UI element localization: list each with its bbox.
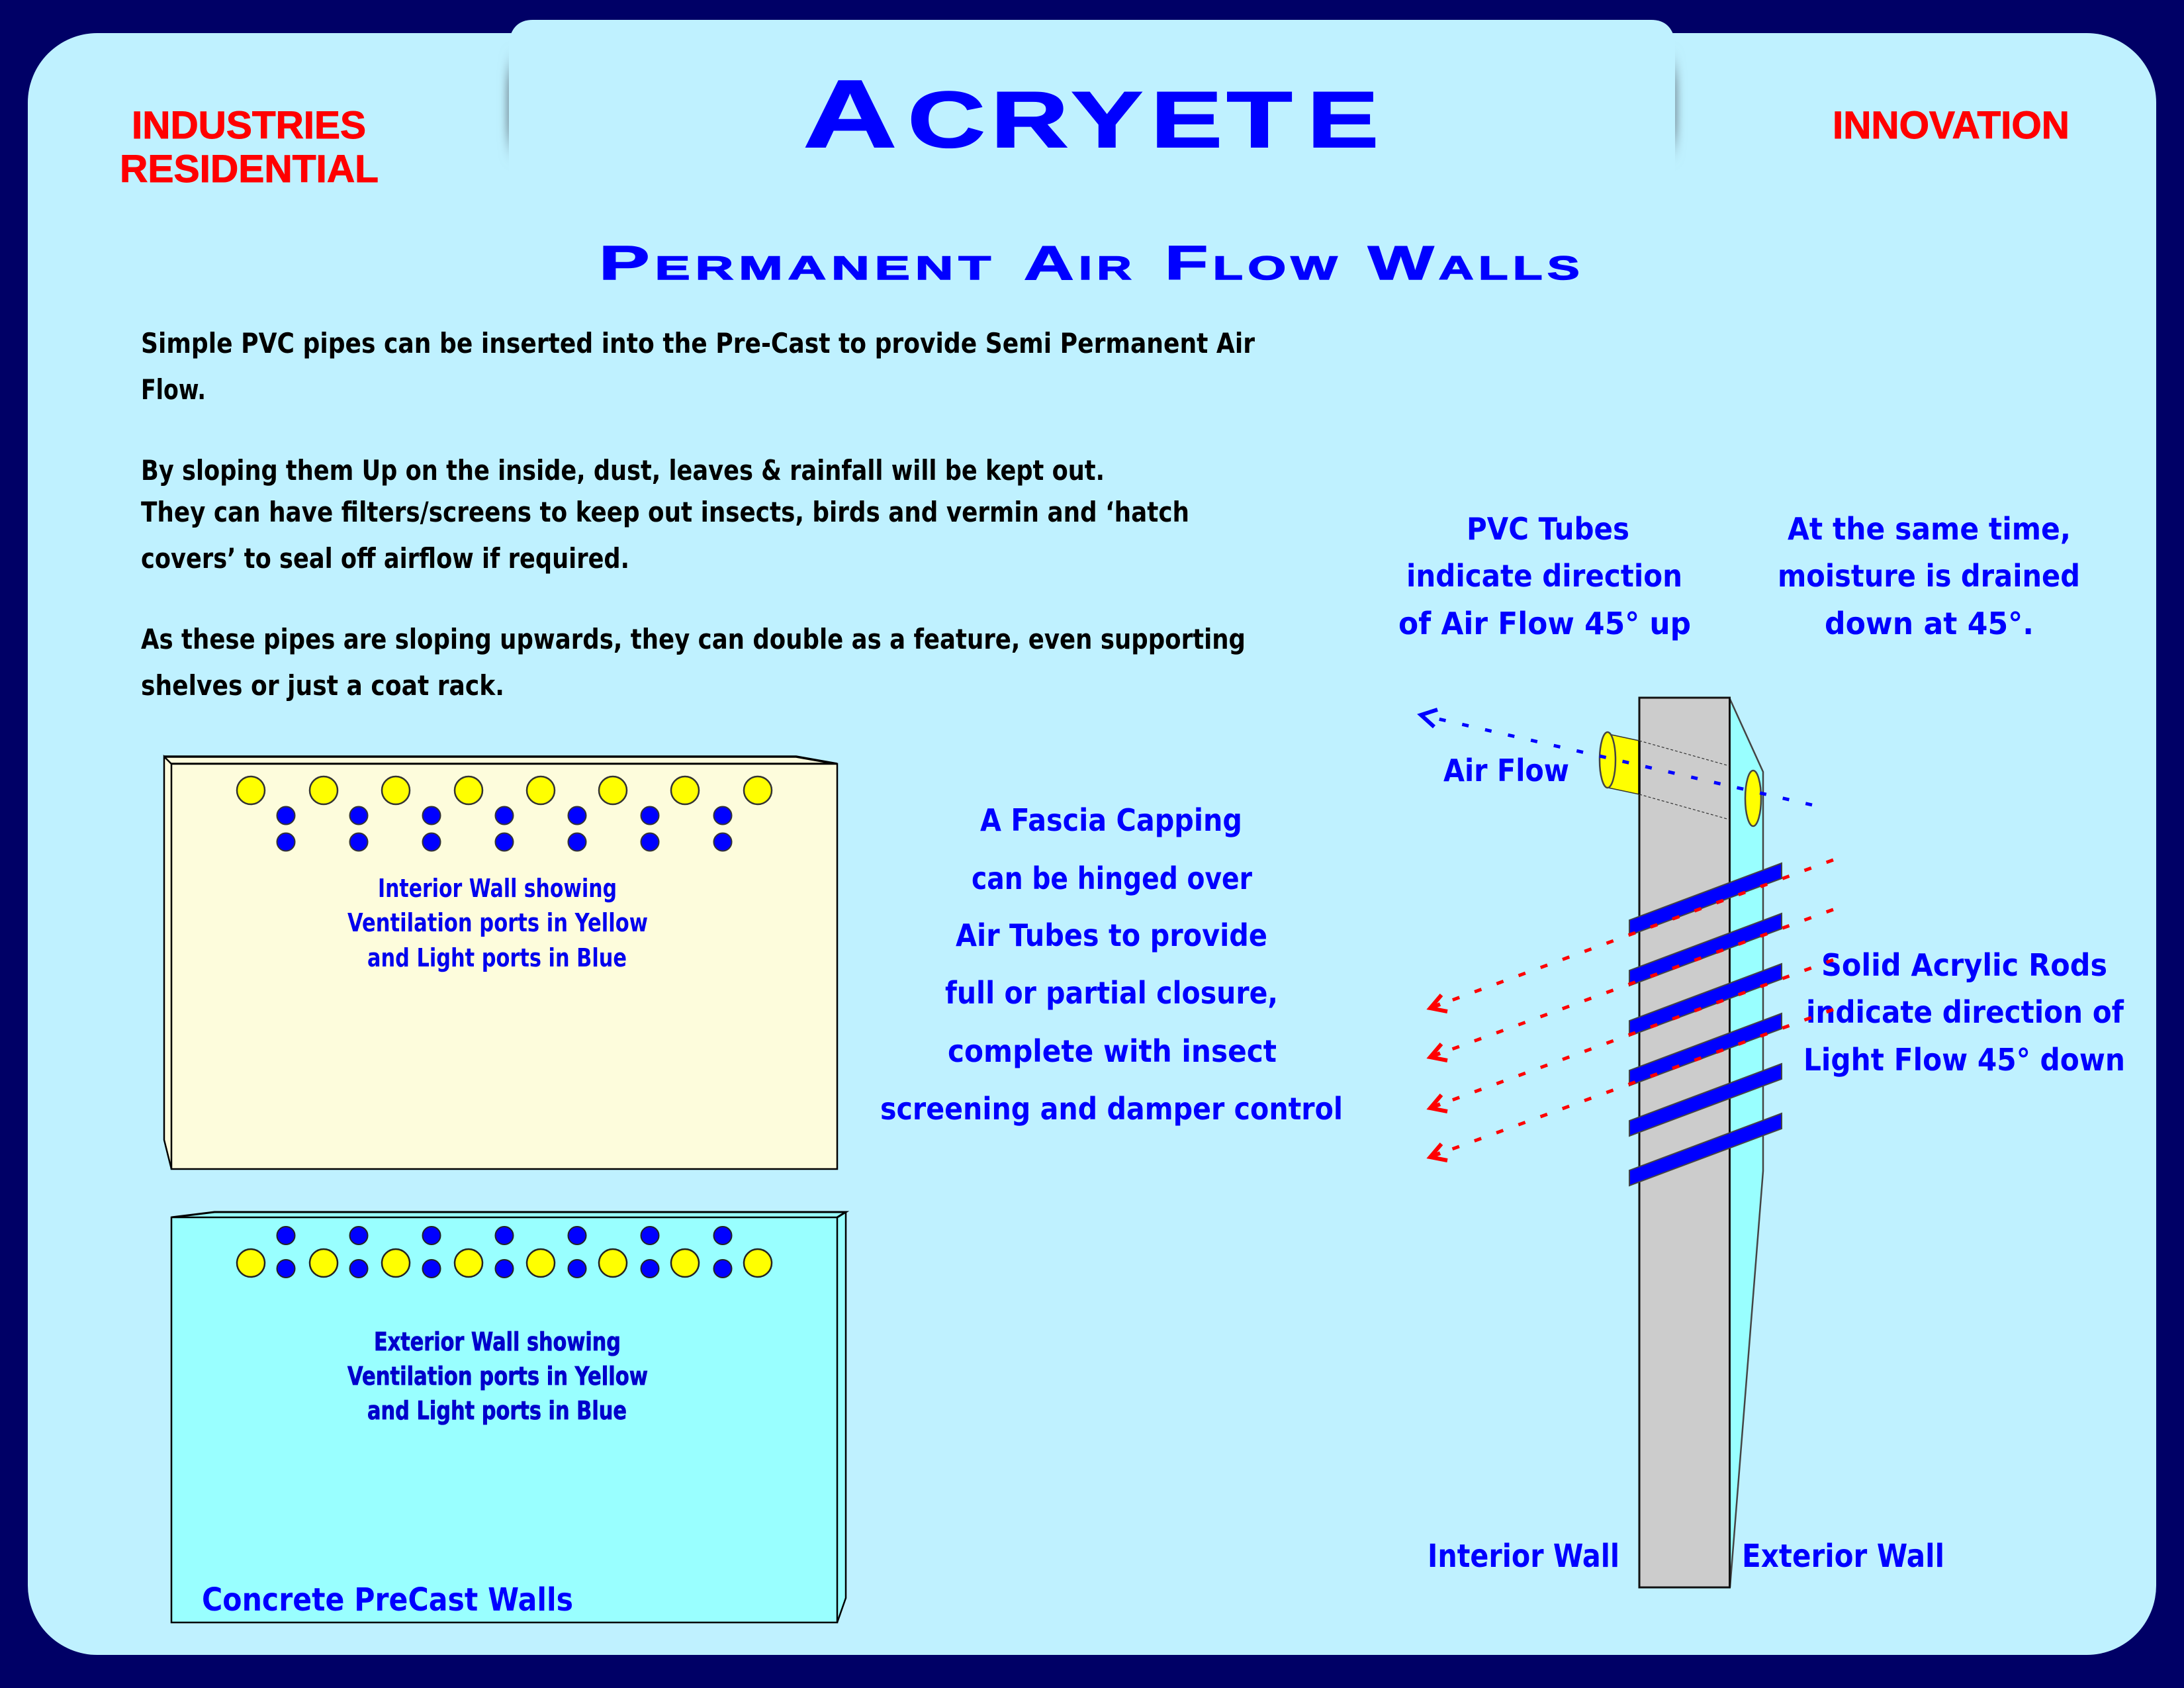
exterior wall caption: Ventilation ports in Yellow	[347, 1362, 648, 1391]
moisture text: At the same time,	[1788, 511, 2071, 547]
category labels left: RESIDENTIAL	[120, 148, 379, 191]
ventilation ports	[237, 1249, 772, 1277]
light ports	[277, 1227, 732, 1278]
acrylic rods	[1629, 863, 1782, 1186]
body text: Simple PVC pipes can be inserted into the Pre-Cast to provide Semi Permanent Air	[141, 327, 1255, 359]
interior wall caption: and Light ports in Blue	[367, 943, 627, 972]
subtitle: Permanent	[599, 237, 996, 290]
title: A	[803, 60, 897, 167]
title: CRYETE	[908, 75, 1379, 164]
pvc tubes text: of Air Flow 45° up	[1398, 606, 1691, 641]
subtitle: Air	[1024, 237, 1136, 290]
fascia capping text: screening and damper control	[880, 1091, 1343, 1127]
interior wall caption: Interior Wall showing	[378, 874, 617, 903]
moisture text	[1778, 511, 2080, 641]
interior wall caption: Ventilation ports in Yellow	[347, 908, 648, 937]
exterior wall label: Exterior Wall	[1742, 1538, 1944, 1575]
title tab	[506, 20, 1678, 179]
pvc tubes text	[1398, 511, 1691, 641]
solid acrylic rods text: indicate direction of	[1806, 994, 2124, 1030]
pvc tubes text: indicate direction	[1406, 558, 1682, 594]
category label right: INNOVATION	[1833, 104, 2070, 147]
wall cross-section diagram	[1421, 698, 2125, 1587]
exterior fascia	[1729, 698, 1763, 1587]
fascia capping text: complete with insect	[948, 1033, 1277, 1069]
category labels left	[120, 104, 379, 191]
body text: By sloping them Up on the inside, dust, leaves & rainfall will be kept out.	[141, 454, 1105, 487]
interior wall caption	[347, 874, 648, 972]
fascia capping text	[880, 802, 1343, 1127]
air flow label: Air Flow	[1443, 753, 1569, 788]
body text: covers’ to seal off airflow if required.	[141, 542, 629, 575]
body text	[141, 327, 1255, 702]
concrete wall	[1639, 698, 1730, 1587]
ventilation ports	[237, 776, 772, 804]
fascia capping text: full or partial closure,	[945, 975, 1278, 1011]
subtitle	[599, 237, 1584, 290]
body text: They can have filters/screens to keep out insects, birds and vermin and ‘hatch	[141, 496, 1189, 528]
category labels left: INDUSTRIES	[132, 104, 366, 147]
pvc tubes text: PVC Tubes	[1467, 511, 1629, 547]
panel: interior wall	[164, 757, 837, 1169]
moisture text: moisture is drained	[1778, 558, 2080, 594]
fascia capping text: A Fascia Capping	[980, 802, 1242, 838]
interior wall label: Interior Wall	[1428, 1538, 1619, 1575]
exterior wall caption	[347, 1327, 648, 1425]
exterior wall caption: and Light ports in Blue	[367, 1396, 627, 1425]
subtitle: Walls	[1368, 237, 1584, 290]
arrow: air flow	[1421, 710, 1812, 805]
light ports	[277, 806, 732, 851]
body text: As these pipes are sloping upwards, they can double as a feature, even supporting	[141, 623, 1246, 655]
panel: exterior wall	[171, 1212, 846, 1622]
body text: shelves or just a coat rack.	[141, 669, 504, 702]
concrete precast label: Concrete PreCast Walls	[202, 1581, 573, 1618]
solid acrylic rods text: Light Flow 45° down	[1803, 1042, 2125, 1078]
moisture text: down at 45°.	[1825, 606, 2034, 641]
solid acrylic rods text: Solid Acrylic Rods	[1821, 947, 2107, 983]
pvc tube	[1600, 732, 1761, 826]
exterior wall caption: Exterior Wall showing	[374, 1327, 621, 1356]
body text: Flow.	[141, 373, 206, 406]
fascia capping text: can be hinged over	[972, 861, 1252, 896]
fascia capping text: Air Tubes to provide	[956, 917, 1267, 953]
arrows: light flow	[1430, 860, 1833, 1160]
subtitle: Flow	[1165, 237, 1342, 290]
solid acrylic rods text	[1803, 947, 2125, 1078]
